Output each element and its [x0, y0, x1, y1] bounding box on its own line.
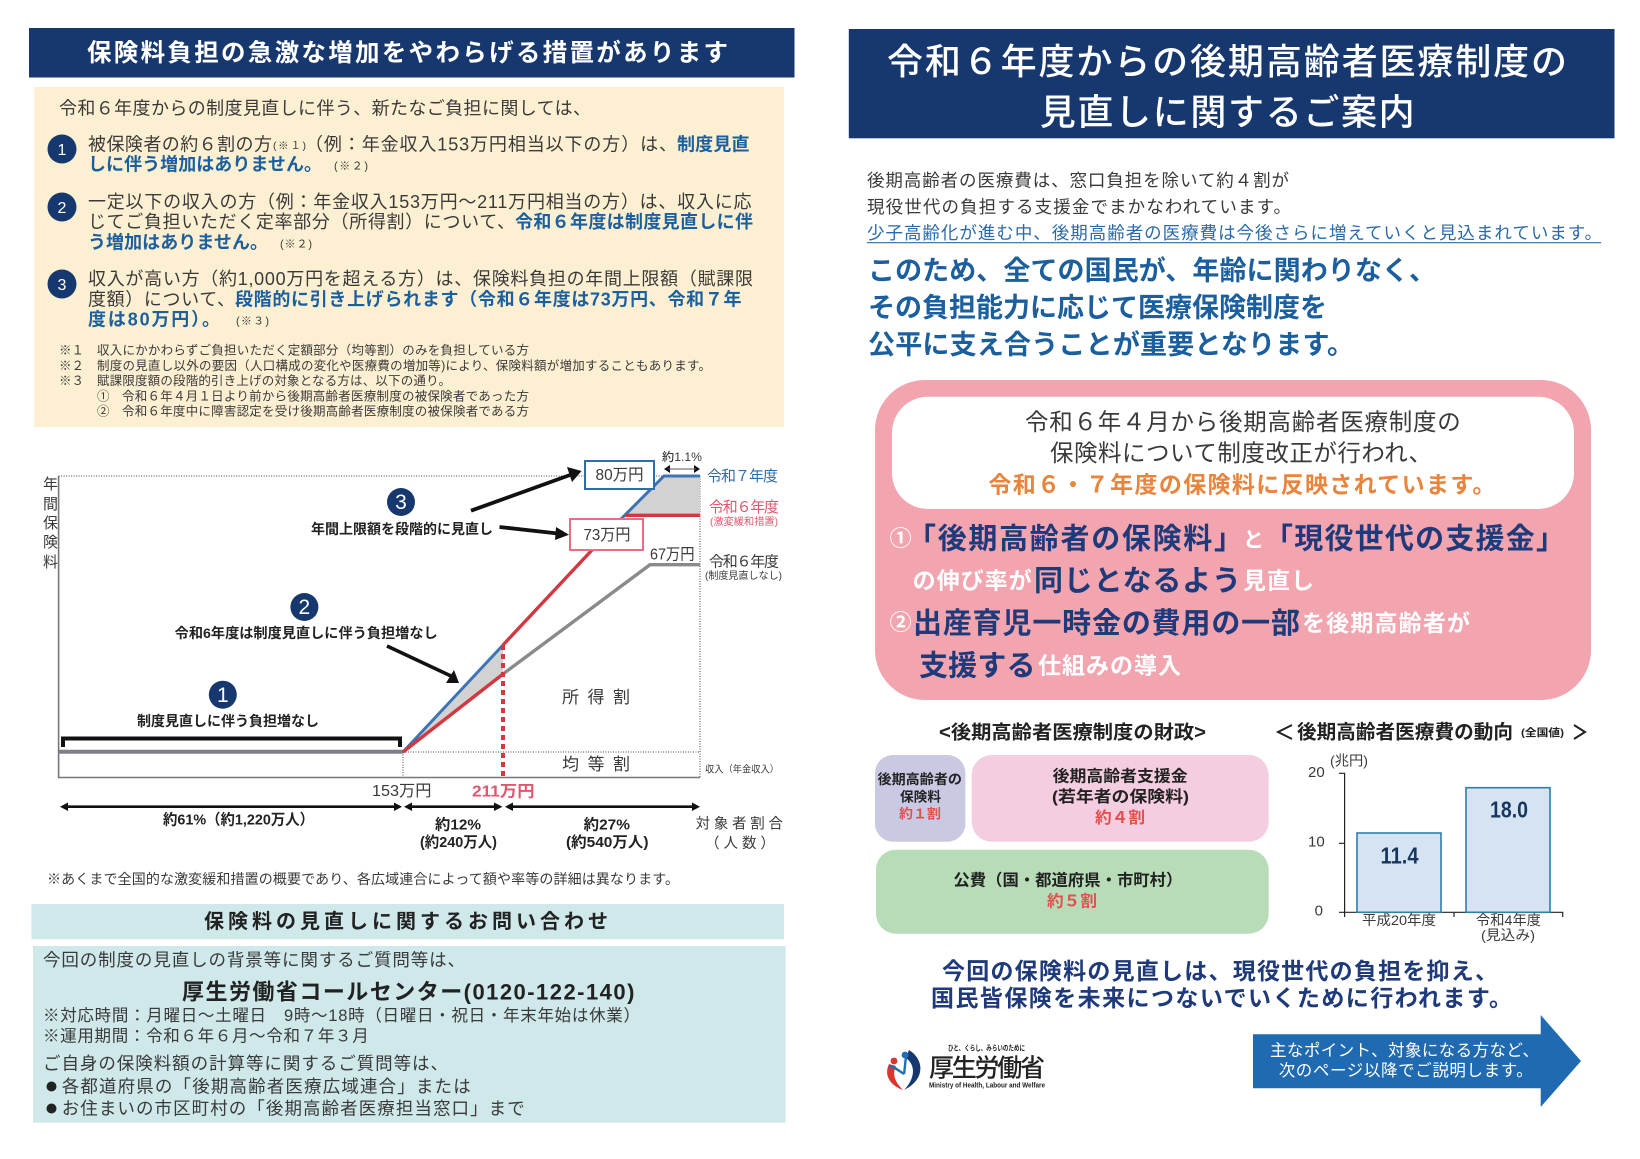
bullet 1: 各都道府県の「後期高齢者医療広域連合」または [62, 1076, 471, 1096]
label: x axis: 収入（年金収入） [705, 764, 779, 776]
label: approx 1.1%: 約1.1% [662, 449, 702, 464]
footnotes: ※３ [59, 374, 84, 388]
point 1: と [1243, 529, 1264, 552]
chart footnote: ※あくまで全国的な激変緩和措置の概要であり、各広域連合によって額や率等の詳細は異なります。 [47, 871, 679, 887]
bar labels [1362, 912, 1541, 943]
box: 73万円 [570, 519, 643, 550]
heading: contact [31, 904, 784, 939]
population shares: 約61%（約1,220万人） [163, 812, 314, 828]
y axis label: 険 [43, 534, 58, 551]
point 2: を後期高齢者が [1302, 610, 1470, 636]
block: public funds: 公費（国・都道府県・市町村） [953, 870, 1182, 890]
label: Reiwa 6 relief [709, 499, 779, 528]
chart: annual premium by income [43, 449, 784, 887]
marker 2 [175, 593, 438, 641]
icon: logo figures [887, 1050, 920, 1090]
item 2: う増加はありません。 [88, 232, 268, 252]
item 3 [48, 269, 753, 330]
marker 1: 制度見直しに伴う負担増なし [137, 713, 319, 729]
panel: contact details: ※運用期間：令和６年６月～令和７年３月 [43, 1026, 369, 1046]
item 3: 度額）について、 [88, 290, 235, 310]
point 2: ② [890, 610, 912, 635]
income thresholds: 211万円 [472, 784, 534, 800]
population shares: （人数） [705, 835, 775, 852]
item 1: 1 [58, 142, 67, 159]
footnotes [59, 342, 711, 418]
intro text: 現役世代の負担する支援金でまかなわれています。 [867, 197, 1291, 217]
population shares: (約240万人) [420, 834, 497, 851]
item 1: しに伴う増加はありません。 [88, 154, 322, 174]
key message: このため、全ての国民が、年齢に関わりなく、 [868, 255, 1436, 286]
arrow: next page: 主なポイント、対象になる方など、 [1270, 1041, 1539, 1060]
arrow to 80万円 [471, 467, 582, 511]
footnotes: 賦課限度額の段階的引き上げの対象となる方は、以下の通り。 [97, 373, 451, 388]
point 1: ① [890, 526, 912, 551]
bar: R4: 18.0 [1490, 796, 1528, 822]
logo: MHLW [887, 1042, 1045, 1090]
label: Reiwa 6 relief: (激変緩和措置) [710, 515, 778, 528]
closing message: 国民皆保険を未来につないでいくために行われます。 [931, 985, 1512, 1011]
item 1: 制度見直 [677, 134, 750, 154]
item 2: (※２) [280, 238, 312, 250]
finance blocks [875, 755, 1269, 934]
marker 3: 3 [395, 491, 407, 514]
item 3: 3 [58, 277, 67, 294]
label: Reiwa 6 no review: (制度見直しなし) [705, 569, 782, 582]
label: Reiwa 6 no review [705, 554, 782, 582]
point 1: 「後期高齢者の保険料」 [907, 522, 1243, 556]
population shares [163, 812, 784, 852]
panel: contact details: 厚生労働省コールセンター(0120-122-140) [182, 980, 634, 1004]
label: Reiwa 6 no review: 令和６年度 [709, 554, 779, 570]
block: elderly premiums [875, 755, 965, 842]
shaded increase areas [403, 476, 700, 752]
bar labels: (見込み) [1481, 927, 1535, 943]
logo: MHLW: Ministry of Health, Labour and Welfare [929, 1080, 1045, 1090]
item 1: 被保険者の約６割の方 [88, 134, 272, 154]
bar labels: 平成20年度 [1362, 912, 1436, 928]
item 2: じてご負担いただく定率部分（所得割）について、 [88, 212, 515, 232]
closing message: 今回の保険料の見直しは、現役世代の負担を抑え、 [942, 958, 1498, 984]
left heading: premium relief measures [29, 28, 794, 78]
closing message [931, 958, 1512, 1011]
population shares: 約27% [584, 816, 630, 834]
bar: H20 [1357, 833, 1441, 912]
arrow: next page: 次のページ以降でご説明します。 [1279, 1061, 1533, 1080]
intro text: 少子高齢化が進む中、後期高齢者の医療費は今後さらに増えていくと見込まれています。 [867, 223, 1602, 243]
income thresholds [372, 783, 534, 800]
intro text: 後期高齢者の医療費は、窓口負担を除いて約４割が [867, 170, 1290, 190]
key message: 公平に支え合うことが重要となります。 [868, 329, 1354, 360]
line: Reiwa 7 (blue) [403, 476, 700, 752]
white callout: 令和６・７年度の保険料に反映されています。 [988, 472, 1495, 498]
logo: MHLW: 厚生労働省 [929, 1054, 1045, 1082]
bar labels: 令和4年度 [1476, 912, 1541, 928]
point 2: 支援する [919, 650, 1036, 682]
logo: MHLW: ひと、くらし、みらいのために [948, 1042, 1025, 1052]
footnotes: ① [97, 390, 110, 404]
white callout [892, 397, 1574, 509]
panel: contact details: ご自身の保険料額の計算等に関するご質問等は、 [43, 1054, 448, 1074]
item 1 [48, 134, 750, 174]
block: support contribution: 約４割 [1095, 809, 1145, 827]
item 3: (※３) [236, 316, 269, 328]
line: Reiwa 6 relief (red) [403, 515, 700, 752]
bar chart: medical costs: 20 [1308, 764, 1325, 781]
marker 3 [311, 488, 493, 537]
point 1 [890, 522, 1565, 598]
brace: no increase range [63, 738, 400, 747]
footnotes: 制度の見直し以外の要因（人口構成の変化や医療費の増加等)により、保険料額が増加することもあります。 [97, 358, 711, 373]
block: public funds: 約５割 [1047, 892, 1097, 910]
item 2 [48, 192, 753, 252]
population range arrows [60, 802, 700, 811]
label: flat portion: 均等割 [562, 755, 630, 774]
block: support contribution: (若年者の保険料) [1052, 787, 1189, 806]
bullet 2: お住まいの市区町村の「後期高齢者医療担当窓口」まで [62, 1098, 525, 1118]
footnotes: 令和６年４月１日より前から後期高齢者医療制度の被保険者であった方 [122, 388, 529, 404]
label: income-based portion: 所得割 [562, 688, 630, 707]
panel: relief measures explanation [34, 87, 784, 427]
heading: cost trend: 後期高齢者医療費の動向 [1297, 720, 1513, 744]
intro text [867, 170, 1602, 243]
footnotes: ※２ [59, 359, 84, 373]
heading: cost trend [1278, 720, 1585, 744]
block: elderly premiums: 約１割 [899, 806, 941, 822]
label: Reiwa 6 relief: 令和６年度 [709, 499, 779, 516]
item 1: (※１) [273, 140, 306, 152]
heading: finance: <後期高齢者医療制度の財政> [939, 722, 1206, 744]
footnotes: ※１ [59, 344, 84, 358]
bar chart: medical costs: (兆円) [1330, 752, 1368, 768]
y axis label: 料 [43, 554, 58, 571]
block: elderly premiums: 保険料 [900, 788, 942, 804]
label: Reiwa 7: 令和７年度 [707, 468, 778, 485]
panel: contact details: ※対応時間：月曜日～土曜日 9時～18時（日曜日・祝日・年末年始は休業） [43, 1006, 640, 1025]
heading: cost trend: (全国値) [1521, 726, 1564, 739]
line: base premium [59, 750, 403, 754]
line: no review (grey) [503, 565, 700, 674]
key message: その負担能力に応じて医療保険制度を [868, 293, 1327, 323]
point 2: 仕組みの導入 [1038, 652, 1181, 678]
population shares: 対象者割合 [696, 816, 784, 832]
item 2: 一定以下の収入の方（例：年金収入153万円～211万円相当の方）は、収入に応 [88, 192, 752, 212]
marker 1: 1 [217, 684, 229, 707]
y axis label: 保 [43, 515, 58, 532]
footnotes: ② [97, 404, 110, 418]
point 1: 見直し [1243, 568, 1314, 594]
block: support contribution [972, 755, 1269, 842]
panel: relief measures explanation: 令和６年度からの制度見直しに伴う、新たなご負担に関しては、 [59, 98, 591, 118]
bar chart: medical costs: 10 [1308, 834, 1325, 850]
heading: contact: 保険料の見直しに関するお問い合わせ [204, 910, 608, 933]
footnotes: 収入にかかわらずご負担いただく定額部分（均等割）のみを負担している方 [97, 342, 529, 358]
footnotes: 令和６年度中に障害認定を受け後期高齢者医療制度の被保険者である方 [122, 404, 529, 418]
point 1: 「現役世代の支援金」 [1264, 522, 1565, 556]
white callout: 令和６年４月から後期高齢者医療制度の [1025, 409, 1461, 435]
arrow to shaded wedge [387, 646, 459, 683]
item 1: （例：年金収入153万円相当以下の方）は、 [305, 134, 677, 154]
marker 3: 年間上限額を段階的に見直し [311, 521, 493, 537]
point 2: 出産育児一時金の費用の一部 [913, 607, 1300, 640]
label: 67万円: 67万円 [650, 546, 694, 564]
point 1: 同じとなるよう [1034, 566, 1241, 598]
y axis label: 年 [43, 476, 58, 493]
y axis label [43, 476, 58, 571]
item 2: 令和６年度は制度見直しに伴 [515, 211, 753, 232]
bar chart: medical costs [1308, 752, 1563, 943]
y axis label: 間 [43, 496, 58, 513]
arrow to 73万円 [500, 527, 569, 540]
label: approx 1.1% [662, 449, 702, 473]
arrow: next page [1253, 1015, 1581, 1107]
box: 80万円 [585, 461, 654, 489]
block: public funds [876, 850, 1269, 934]
white callout: 保険料について制度改正が行われ、 [1050, 440, 1432, 466]
point 2 [890, 607, 1470, 682]
box: 73万円: 73万円 [584, 527, 630, 544]
key message [868, 255, 1436, 360]
box: 80万円: 80万円 [596, 467, 644, 484]
marker 2: 令和6年度は制度見直しに伴う負担増なし [175, 625, 438, 641]
population shares: 約12% [435, 816, 481, 834]
panel: system revision [875, 380, 1591, 700]
income threshold dashed line [501, 645, 505, 777]
population shares: (約540万人) [566, 834, 648, 851]
marker 2: 2 [299, 596, 310, 619]
item 2: 2 [58, 200, 67, 217]
left heading: premium relief measures: 保険料負担の急激な増加をやわらげる措置があります [87, 38, 728, 67]
main title: 令和６年度からの後期高齢者医療制度の [887, 41, 1567, 82]
item 3: 段階的に引き上げられます（令和６年度は73万円、令和７年 [235, 288, 742, 310]
block: support contribution: 後期高齢者支援金 [1053, 766, 1188, 786]
item 1: (※２) [334, 160, 368, 172]
marker 1 [137, 681, 319, 729]
bar: H20: 11.4 [1380, 842, 1419, 868]
main title: 見直しに関するご案内 [1040, 92, 1415, 132]
point 1: の伸び率が [913, 568, 1032, 594]
bar: R4 [1466, 788, 1550, 912]
item 3: 度は80万円）。 [88, 310, 220, 330]
panel: contact details [33, 946, 786, 1123]
panel: contact details: 今回の制度の見直しの背景等に関するご質問等は、 [43, 950, 465, 970]
block: elderly premiums: 後期高齢者の [878, 771, 962, 787]
item 3: 収入が高い方（約1,000万円を超える方）は、保険料負担の年間上限額（賦課限 [88, 269, 753, 289]
income thresholds: 153万円 [372, 783, 432, 800]
main title [849, 29, 1614, 138]
bar chart: medical costs: 0 [1315, 902, 1323, 920]
